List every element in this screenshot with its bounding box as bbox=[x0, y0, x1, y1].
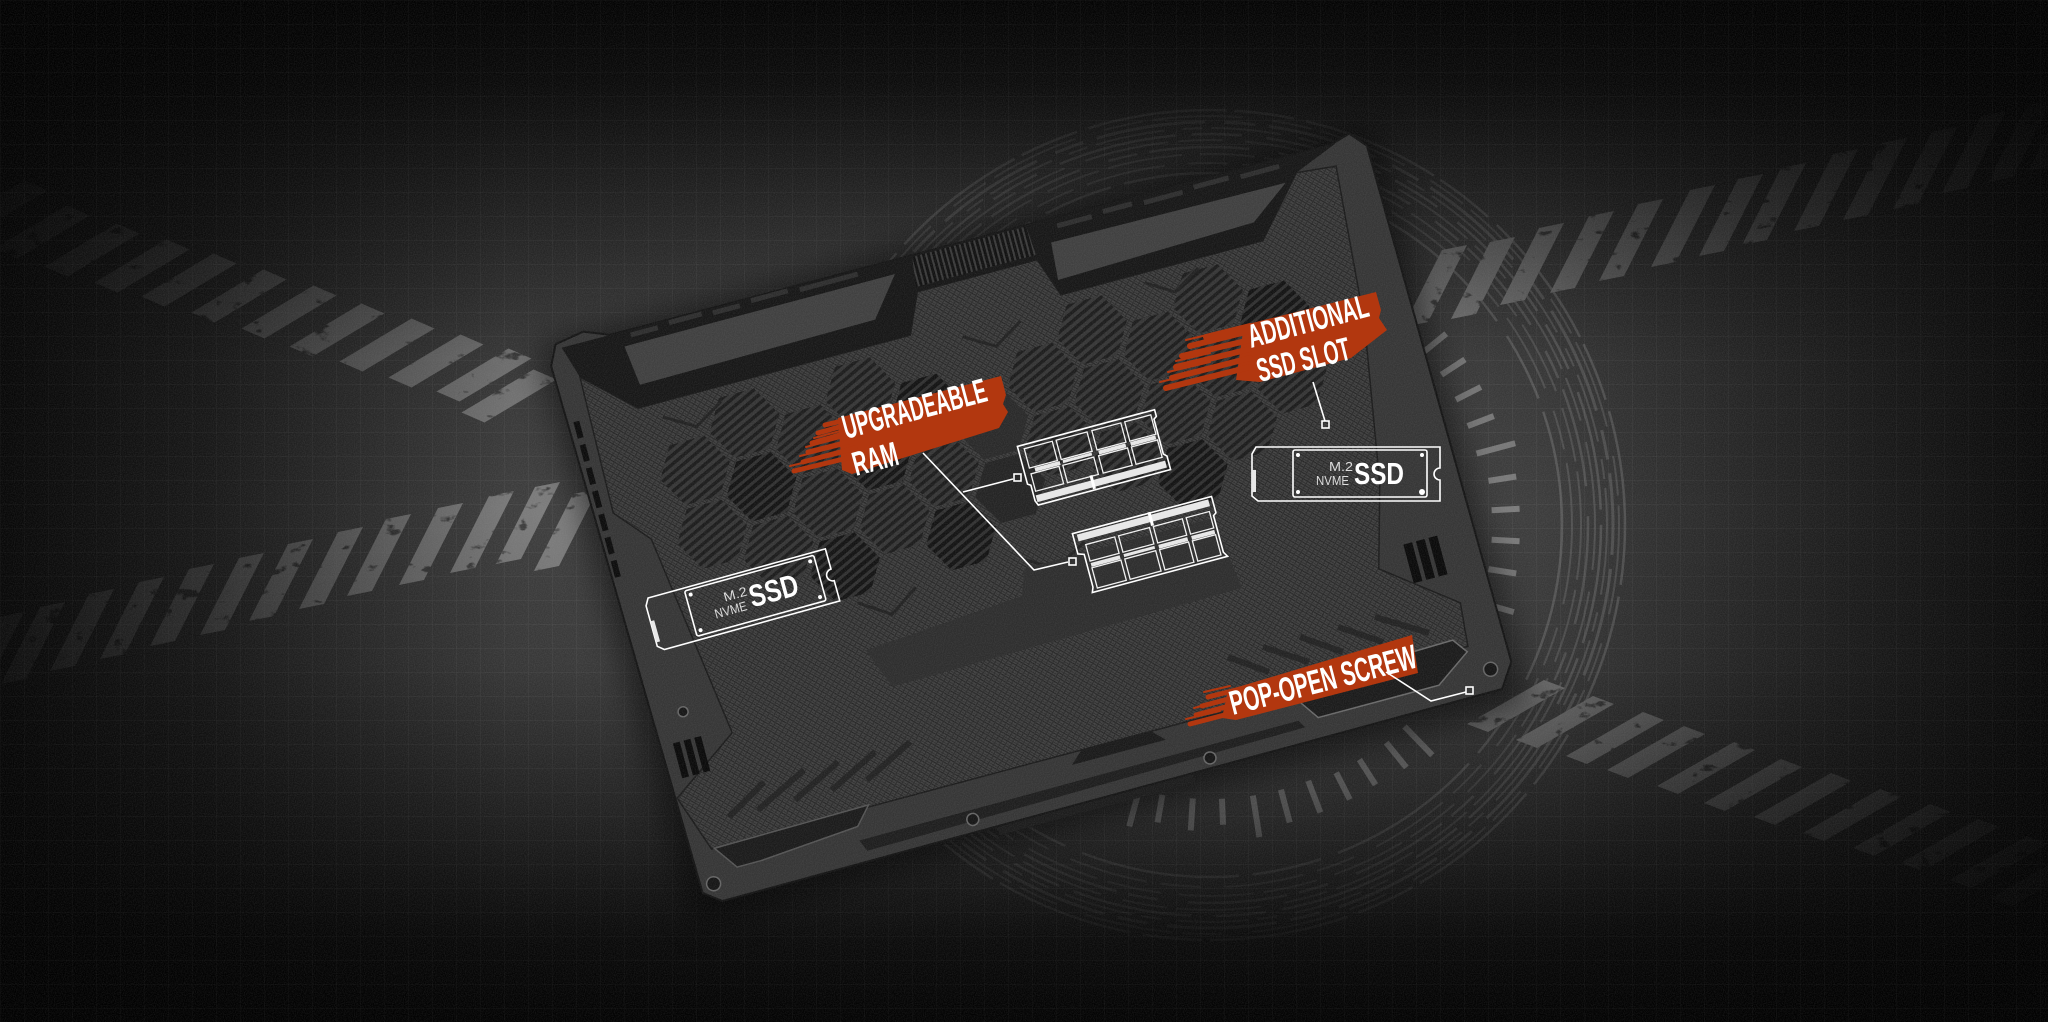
chevron marks bbox=[662, 268, 1264, 658]
label text second line: RAM bbox=[848, 435, 903, 484]
connector line bbox=[1386, 672, 1466, 701]
side vents left bbox=[573, 421, 621, 578]
lower-right black plate bbox=[1284, 637, 1474, 724]
label text: POP-OPEN SCREW bbox=[1225, 638, 1421, 723]
SSD label: SSD bbox=[1354, 456, 1404, 491]
center mesh bbox=[908, 226, 1036, 287]
hinge protrusion bbox=[996, 767, 1195, 835]
connector lines bbox=[923, 453, 1068, 570]
connector node bbox=[1466, 687, 1473, 694]
label text: ADDITIONAL bbox=[1243, 287, 1373, 355]
laptop drop shadow bbox=[539, 123, 1529, 926]
connector line bbox=[1313, 382, 1325, 421]
hazard stripes: lower right bbox=[1467, 680, 2048, 906]
corner vent right bbox=[1403, 536, 1448, 583]
corner vent lower-left bbox=[673, 736, 710, 778]
M.2 label: M.2 bbox=[722, 584, 749, 605]
red brush stroke bbox=[790, 376, 1008, 474]
callout: additional SSD slot bbox=[1160, 287, 1387, 428]
hazard stripes: upper right bbox=[1403, 89, 2048, 327]
red brush stroke bbox=[1160, 292, 1387, 388]
callout: upgradeable RAM bbox=[790, 372, 1076, 570]
laptop body bbox=[545, 122, 1518, 908]
center flat panel bbox=[856, 515, 1243, 691]
M.2 SSD right bbox=[1252, 447, 1440, 501]
RAM module bottom bbox=[1072, 495, 1228, 594]
bottom notch bbox=[1069, 728, 1166, 765]
M.2 label: M.2 bbox=[1329, 459, 1353, 474]
label text: UPGRADEABLE bbox=[838, 372, 991, 447]
hazard stripes: lower left bbox=[0, 482, 598, 694]
SSD label: SSD bbox=[745, 567, 802, 614]
connector node bbox=[1322, 421, 1329, 428]
dark slashes lower right bbox=[1228, 617, 1429, 672]
screws bbox=[661, 500, 1502, 898]
laptop underside bbox=[545, 122, 1520, 916]
hazard stripes: upper left bbox=[0, 180, 556, 422]
connector node bottom bbox=[1069, 558, 1076, 565]
left gray vent cover bbox=[625, 274, 906, 386]
top-edge exhaust fins bbox=[630, 157, 1280, 342]
tire track rings bbox=[795, 110, 1625, 940]
callout: pop-open screw bbox=[1186, 635, 1473, 724]
NVME label: NVME bbox=[1316, 473, 1349, 488]
red brush stroke bbox=[1186, 635, 1418, 724]
gauge tick marks bbox=[1129, 334, 1520, 837]
bottom strip bbox=[859, 720, 1307, 852]
lower-left black plate bbox=[714, 805, 875, 871]
NVME label: NVME bbox=[713, 598, 749, 622]
dark slashes lower left bbox=[729, 742, 910, 817]
top frame bbox=[562, 141, 1355, 423]
label text second line: SSD SLOT bbox=[1253, 330, 1354, 389]
M.2 SSD left bbox=[644, 549, 840, 651]
carbon panel bbox=[562, 160, 1472, 854]
right gray vent cover bbox=[1048, 180, 1295, 280]
RAM module top bbox=[1017, 410, 1171, 506]
hexagon vent pattern bbox=[644, 244, 1352, 637]
connector node top bbox=[1014, 474, 1021, 481]
